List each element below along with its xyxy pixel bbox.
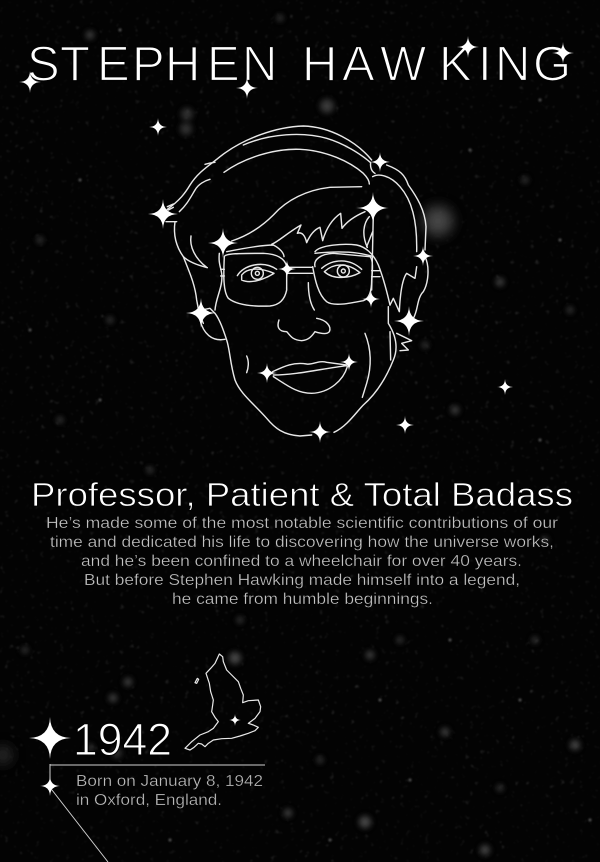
timeline lines [50,764,265,862]
small star [40,776,60,796]
hair outline [166,126,428,318]
glasses [221,253,380,306]
year 1942: 1942 [73,714,172,765]
subtitle heading: Professor, Patient & Total Badass [31,477,573,514]
nose [278,283,330,341]
timeline entry: 1942 [29,654,265,862]
icon: map of England [185,654,261,750]
portrait constellation line drawing [166,126,428,436]
mouth [273,362,347,393]
birth caption: in Oxford, England. [76,792,222,809]
constellation stars [19,36,574,443]
face outline [183,253,412,436]
intro paragraph: He’s made some of the most notable scientific contributions of our [46,515,559,532]
birth caption: Born on January 8, 1942 [76,773,263,790]
intro paragraph: he came from humble beginnings. [172,591,433,608]
eyes and brows [227,244,390,305]
large star [29,717,71,759]
intro paragraph: and he’s been confined to a wheelchair for over 40 years. [81,553,522,570]
title: STEPHEN HAWKING [27,38,571,92]
intro paragraph: But before Stephen Hawking made himself into a legend, [84,572,520,589]
intro paragraph [46,515,559,608]
birth caption [76,773,263,809]
intro paragraph: time and dedicated his life to discovering how the universe works, [50,534,554,551]
